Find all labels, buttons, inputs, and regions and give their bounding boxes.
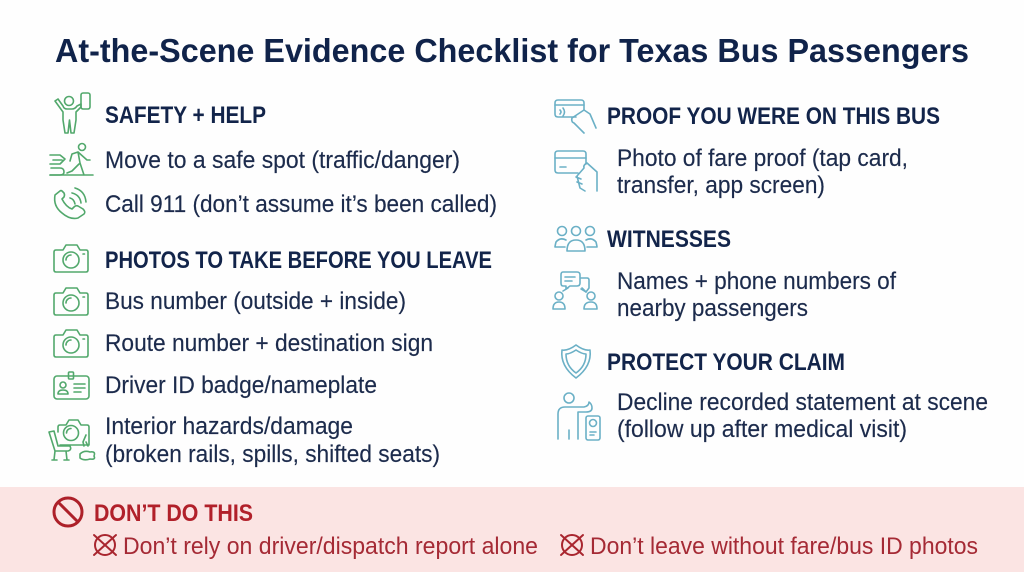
icon: phone call — [55, 188, 86, 218]
icon: camera heading — [54, 245, 88, 272]
icon: camera route number — [54, 330, 88, 357]
icon: person moving away from traffic — [50, 144, 93, 175]
text: fare proof — [617, 145, 908, 199]
panel: protect your claim — [558, 345, 988, 443]
panel: witnesses — [553, 226, 896, 322]
panel: don't do this — [0, 487, 1024, 572]
icon: tap card — [555, 100, 596, 133]
text: decline statement: (follow up after medical visit) — [617, 416, 907, 443]
icon: person waving with phone — [55, 93, 90, 133]
panel: proof you were on this bus — [555, 100, 940, 199]
heading: protect: PROTECT YOUR CLAIM — [607, 349, 845, 376]
text: call 911: Call 911 (don’t assume it’s been called) — [105, 191, 497, 218]
icon: fare card in hand — [555, 151, 597, 191]
text: bus number: Bus number (outside + inside) — [105, 288, 406, 315]
text: interior hazards: (broken rails, spills, shifted seats) — [105, 441, 440, 468]
text: names and phones: Names + phone numbers of — [617, 268, 896, 295]
text: decline statement: Decline recorded statement at scene — [617, 389, 988, 416]
text: interior hazards — [105, 413, 440, 468]
icon: shield — [562, 345, 590, 378]
icon: group of people — [555, 226, 597, 251]
heading: safety and help: SAFETY + HELP — [105, 102, 266, 129]
text: driver ID: Driver ID badge/nameplate — [105, 372, 377, 399]
text: decline statement — [617, 389, 988, 443]
heading: witnesses: WITNESSES — [607, 226, 731, 253]
text: interior hazards: Interior hazards/damage — [105, 413, 353, 440]
icon: interior hazards — [49, 420, 94, 460]
icon: driver ID badge — [54, 372, 89, 399]
text: don't leave without photos: Don’t leave without fare/bus ID photos — [590, 533, 978, 560]
heading: don't do this: DON’T DO THIS — [94, 500, 253, 527]
heading: photos to take: PHOTOS TO TAKE BEFORE YOU LEAVE — [105, 247, 492, 274]
text: move to a safe spot: Move to a safe spot (traffic/danger) — [105, 147, 460, 174]
text: don't rely on report: Don’t rely on driver/dispatch report alone — [123, 533, 538, 560]
text: route number: Route number + destination sign — [105, 330, 433, 357]
icon: crossed circle one — [94, 535, 116, 555]
text: names and phones — [617, 268, 896, 322]
icon: person declining with recorder — [558, 393, 600, 440]
text: fare proof: Photo of fare proof (tap card, — [617, 145, 908, 172]
text: names and phones: nearby passengers — [617, 295, 808, 322]
heading: proof: PROOF YOU WERE ON THIS BUS — [607, 103, 940, 130]
panel: photos to take — [49, 245, 492, 468]
icon: people talking — [553, 272, 597, 309]
icon: crossed circle two — [561, 535, 583, 555]
text: fare proof: transfer, app screen) — [617, 172, 825, 199]
title: At-the-Scene Evidence Checklist for Texas Bus Passengers — [55, 32, 969, 69]
panel: safety and help — [50, 93, 497, 218]
icon: camera bus number — [54, 288, 88, 315]
icon: prohibition sign — [54, 498, 82, 526]
